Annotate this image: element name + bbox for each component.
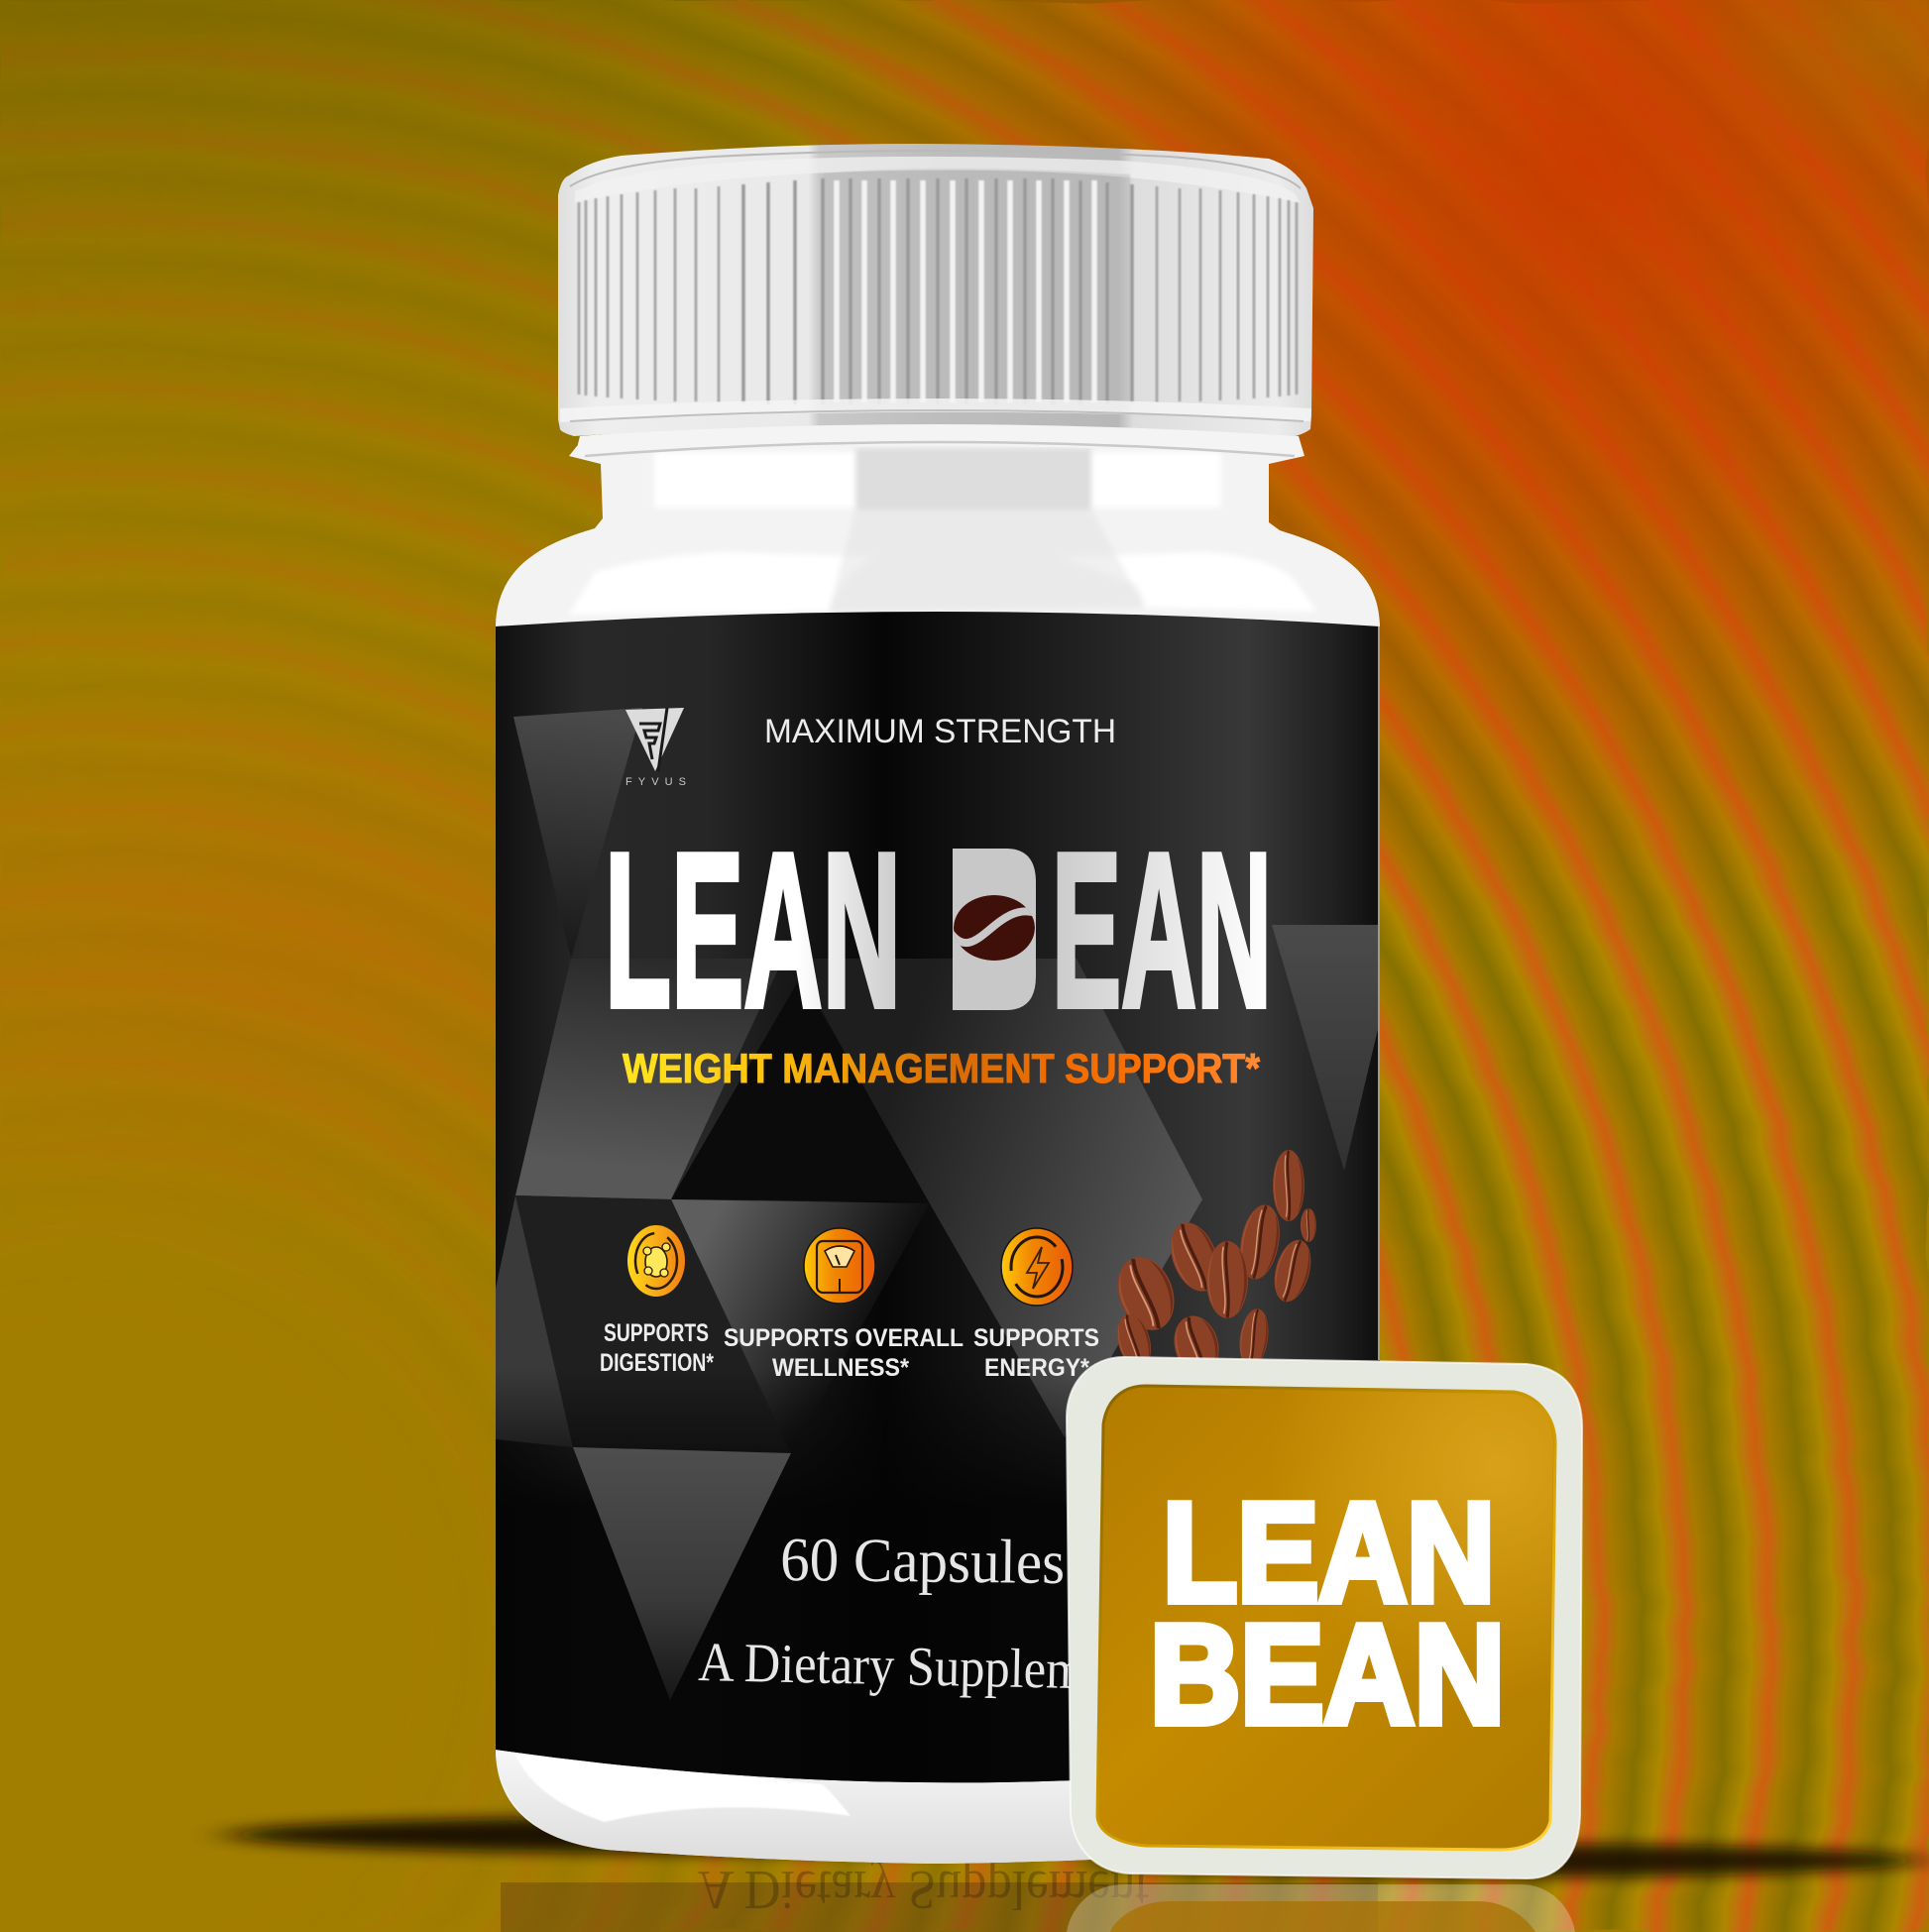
logo: FYVUS: FYVUS <box>625 776 686 788</box>
bottle neck and shoulder <box>496 421 1380 1864</box>
text: supports digestion <box>600 1319 714 1377</box>
text: 60 capsules: 60 Capsules <box>780 1525 1066 1597</box>
bottle reflection on floor <box>501 1859 1378 1932</box>
title: Lean Bean: B <box>947 811 1034 1057</box>
title: Lean Bean <box>611 849 1267 1010</box>
Lean Bean badge tile <box>1067 1357 1582 1878</box>
logo: FYVUS <box>625 708 686 788</box>
text: supports overall wellness: SUPPORTS OVERALL <box>724 1324 964 1352</box>
label <box>496 612 1380 1804</box>
subtitle: weight management support: WEIGHT MANAGEMENT SUPPORT* <box>623 1045 1261 1091</box>
badge gold panel <box>1097 1386 1555 1850</box>
text: supports digestion: SUPPORTS <box>604 1319 709 1347</box>
text: supports energy: SUPPORTS <box>973 1324 1099 1352</box>
text: supports overall wellness: WELLNESS* <box>772 1354 909 1382</box>
icon: coffee bean in the B <box>950 895 1039 961</box>
cap <box>558 144 1313 456</box>
floor shadow <box>228 1816 1923 1877</box>
coffee beans <box>1108 1150 1317 1380</box>
label facets <box>496 708 1380 1804</box>
text: maximum strength: MAXIMUM STRENGTH <box>764 713 1116 750</box>
bottle base <box>496 1745 1380 1864</box>
label: EAN <box>1052 808 1272 1054</box>
text: supports digestion: DIGESTION* <box>600 1349 714 1377</box>
text: supports overall wellness <box>724 1324 964 1382</box>
badge text <box>1150 1474 1505 1754</box>
bottle reflection on floor: A Dietary Supplement <box>698 1859 1150 1921</box>
badge text: LEAN <box>1163 1474 1495 1632</box>
icon: energy <box>1001 1228 1073 1306</box>
bottle <box>496 144 1380 1864</box>
text: supports energy <box>973 1324 1099 1382</box>
icon: digestion <box>627 1225 685 1297</box>
icon: scale <box>804 1228 875 1304</box>
text: supports energy: ENERGY* <box>984 1354 1089 1382</box>
text: a dietary supplement: A Dietary Supplement <box>698 1632 1147 1702</box>
tile reflection <box>1067 1884 1575 1932</box>
badge text: BEAN <box>1150 1596 1505 1754</box>
label right rim <box>1378 626 1380 1360</box>
title: Lean Bean: LEAN <box>605 808 901 1054</box>
